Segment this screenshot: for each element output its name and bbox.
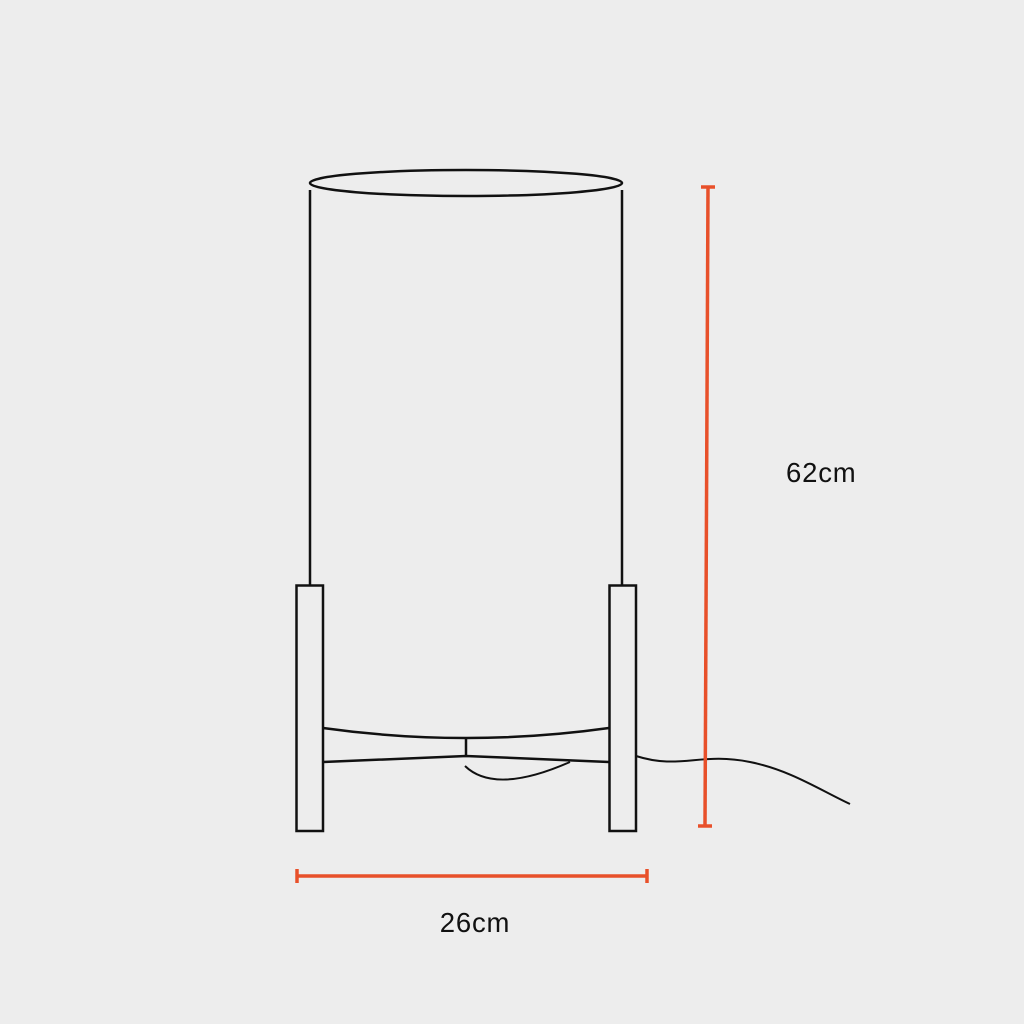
cross bars (323, 756, 609, 762)
width label: 26cm (440, 907, 510, 938)
left leg (296, 586, 323, 831)
width dimension line (297, 869, 647, 883)
height label: 62cm (786, 457, 856, 488)
shade sides (310, 190, 622, 586)
height dimension line (698, 187, 715, 826)
cord to plug (636, 756, 850, 804)
right leg (610, 586, 636, 831)
cord under base (465, 762, 570, 780)
shade bottom curve (323, 728, 609, 738)
shade top ellipse (310, 170, 622, 196)
stem (465, 739, 467, 756)
lamp drawing (296, 170, 850, 831)
